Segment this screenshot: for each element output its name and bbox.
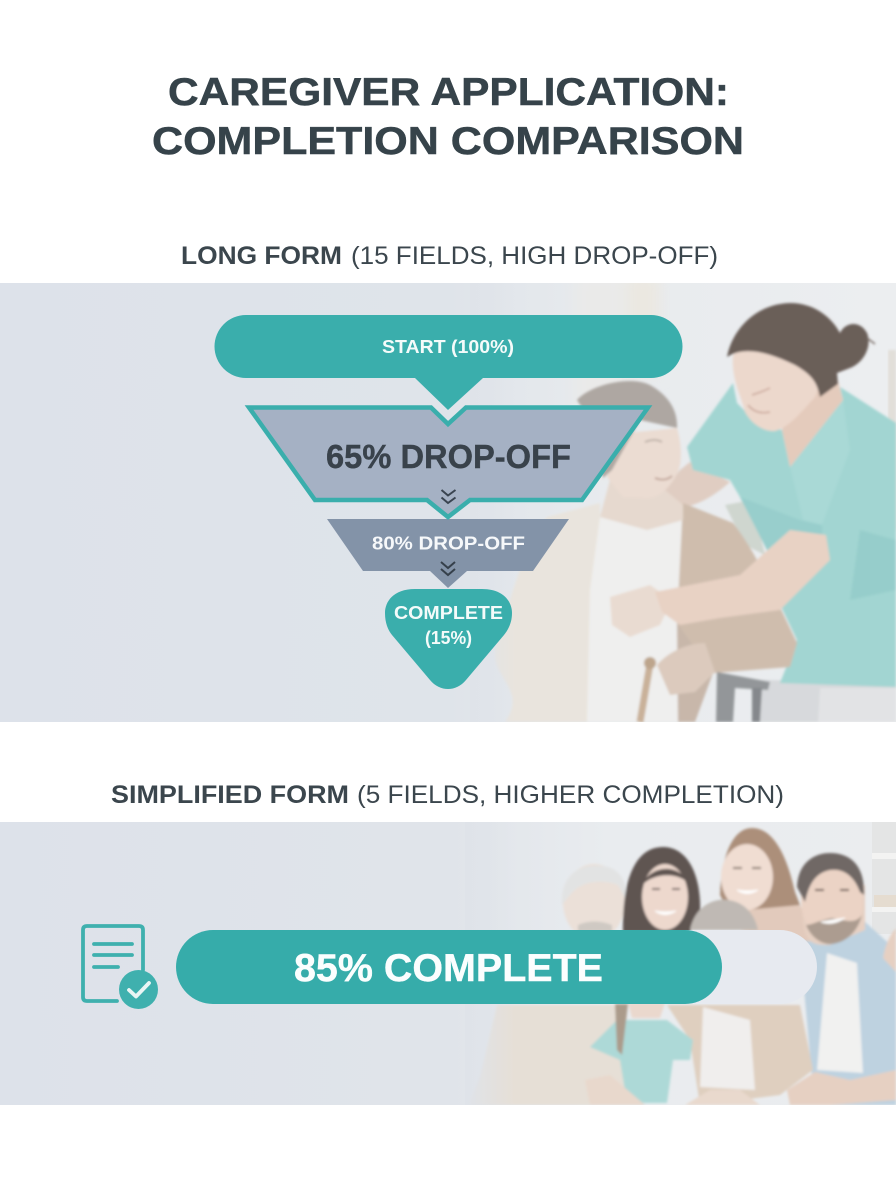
woman right — [720, 828, 800, 915]
plant — [725, 500, 765, 555]
hands — [585, 1075, 645, 1105]
old woman right cardigan — [678, 504, 798, 674]
nurse neck and face — [781, 384, 844, 466]
heading: long form: (15 FIELDS, HIGH DROP-OFF) — [351, 242, 718, 270]
walker — [716, 672, 770, 722]
old woman shirt — [587, 528, 645, 722]
grandmother cardigan — [667, 1005, 813, 1105]
title: CAREGIVER APPLICATION: — [168, 71, 729, 114]
funnel stage: complete 15%: COMPLETE — [394, 603, 503, 623]
funnel stage: 65% drop-off — [249, 408, 648, 517]
funnel stage: 80% drop-off — [327, 519, 569, 588]
progress label: 85% COMPLETE — [294, 947, 603, 990]
bookshelf — [872, 822, 896, 934]
woman left — [623, 847, 700, 932]
start bar: START (100%) — [382, 337, 514, 357]
heading: long form — [181, 242, 718, 270]
left fade — [469, 1032, 493, 1105]
heading: long form: LONG FORM — [181, 242, 342, 270]
nurse back arm — [665, 462, 730, 506]
panel: simplified form progress — [0, 822, 896, 1105]
lower hand and cane — [657, 643, 715, 695]
title: COMPLETION COMPARISON — [152, 120, 744, 163]
funnel stage: complete 15% — [385, 589, 512, 689]
title — [152, 71, 744, 163]
start bar — [215, 315, 683, 410]
arm around shoulder — [883, 928, 896, 972]
older man head — [563, 864, 626, 930]
heading: simplified form: (5 FIELDS, HIGHER COMPLETION) — [357, 781, 784, 809]
child — [590, 1020, 693, 1103]
old woman left cardigan — [495, 503, 600, 722]
nurse trousers — [758, 680, 896, 722]
man right: denim shirt — [800, 920, 896, 1105]
panel: long form funnel — [0, 275, 896, 722]
man right head — [812, 886, 866, 946]
icon: form with check mark — [83, 926, 158, 1009]
progress track — [176, 930, 817, 1004]
older man body — [468, 1005, 640, 1105]
funnel stage: 80% drop-off: 80% DROP-OFF — [372, 534, 525, 554]
clasped hands — [610, 585, 665, 637]
heading: simplified form: SIMPLIFIED FORM — [111, 781, 349, 809]
funnel stage: complete 15%: (15%) — [425, 628, 472, 648]
funnel stage: 65% drop-off: 65% DROP-OFF — [326, 438, 571, 475]
left fade — [470, 283, 515, 722]
grandmother hair — [690, 900, 758, 930]
progress fill — [176, 930, 722, 1004]
photo: smiling family — [0, 822, 896, 1105]
progress bar — [176, 930, 817, 1004]
heading: simplified form — [111, 781, 784, 809]
old woman neck and face — [600, 480, 683, 530]
nurse hair — [727, 303, 869, 397]
nurse scrubs — [687, 383, 896, 687]
photo: nurse caring for elderly woman — [0, 275, 896, 722]
